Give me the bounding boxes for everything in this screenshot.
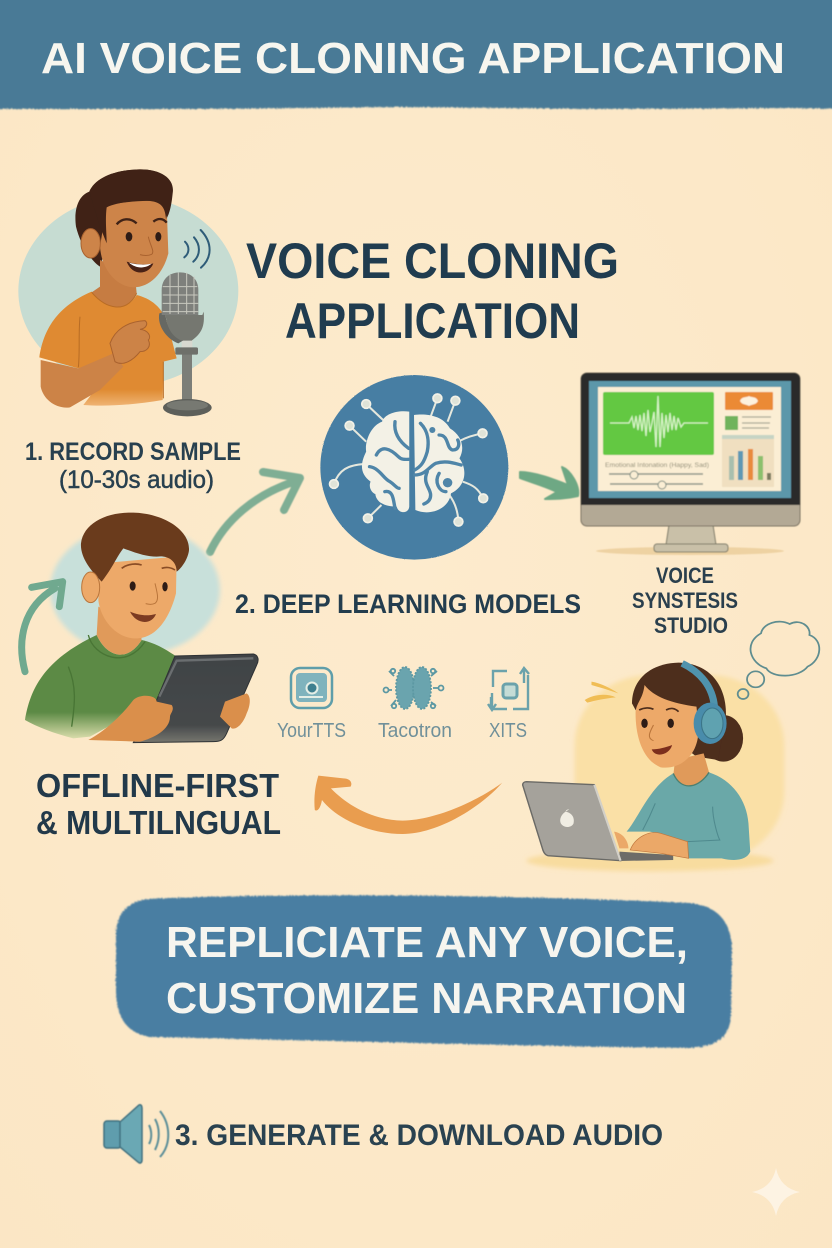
thought bubble	[738, 622, 819, 699]
step 1 label: (10-30s audio)	[59, 466, 214, 494]
model: XITS	[488, 668, 529, 742]
label: offline-first and multilingual: & MULTILNGUAL	[36, 804, 281, 841]
model: Tacotron	[378, 667, 452, 742]
illustration: boy with tablet	[22, 513, 258, 743]
main title: APPLICATION	[285, 293, 580, 349]
model: XITS: XITS	[489, 720, 527, 742]
arrow: record to models	[210, 472, 300, 552]
monitor caption: VOICE	[656, 563, 714, 588]
arrow: models to studio	[520, 467, 578, 499]
step 3 label: 3. GENERATE & DOWNLOAD AUDIO	[175, 1119, 663, 1152]
label: offline-first and multilingual: OFFLINE-FIRST	[36, 767, 279, 804]
monitor caption: SYNSTESIS	[632, 588, 738, 613]
monitor: voice synthesis studio: Emotional Intonation (Happy, Sad)	[605, 462, 709, 469]
monitor: voice synthesis studio	[581, 373, 800, 555]
illustration: man recording at microphone	[18, 169, 238, 416]
callout banner: CUSTOMIZE NARRATION	[166, 974, 687, 1023]
callout banner	[116, 895, 732, 1048]
icon: microphone	[159, 272, 212, 416]
monitor caption	[632, 563, 738, 638]
model: Tacotron: Tacotron	[378, 720, 452, 742]
monitor caption: STUDIO	[654, 613, 728, 638]
laptop	[523, 782, 673, 861]
main title: VOICE CLONING	[246, 233, 619, 289]
icon: speaker	[104, 1105, 168, 1163]
header title: AI VOICE CLONING APPLICATION	[41, 34, 785, 83]
illustration: woman with headphones and laptop	[523, 622, 819, 871]
main title	[246, 233, 619, 349]
chart: bar chart panel	[722, 435, 774, 487]
arrow: up-right green	[22, 582, 63, 672]
icon: sparkle watermark	[752, 1168, 800, 1216]
icon: brain in blue circle	[320, 375, 508, 560]
icon: YourTTS	[291, 668, 332, 708]
header banner	[0, 0, 832, 109]
icon: Tacotron brain network	[384, 667, 444, 709]
icon: XITS	[488, 668, 529, 710]
step 1 label: 1. RECORD SAMPLE	[25, 438, 241, 466]
arrow: orange curved return	[314, 776, 502, 834]
callout banner: REPLICIATE ANY VOICE,	[166, 918, 688, 967]
icon: sound waves from speaker	[184, 230, 210, 268]
step 2 label: 2. DEEP LEARNING MODELS	[235, 589, 581, 619]
model: YourTTS	[277, 668, 346, 742]
headphones	[682, 663, 727, 744]
chart: waveform	[610, 396, 708, 447]
step 1 label	[25, 438, 241, 494]
model: YourTTS: YourTTS	[277, 720, 346, 742]
label: offline-first and multilingual	[36, 767, 281, 841]
